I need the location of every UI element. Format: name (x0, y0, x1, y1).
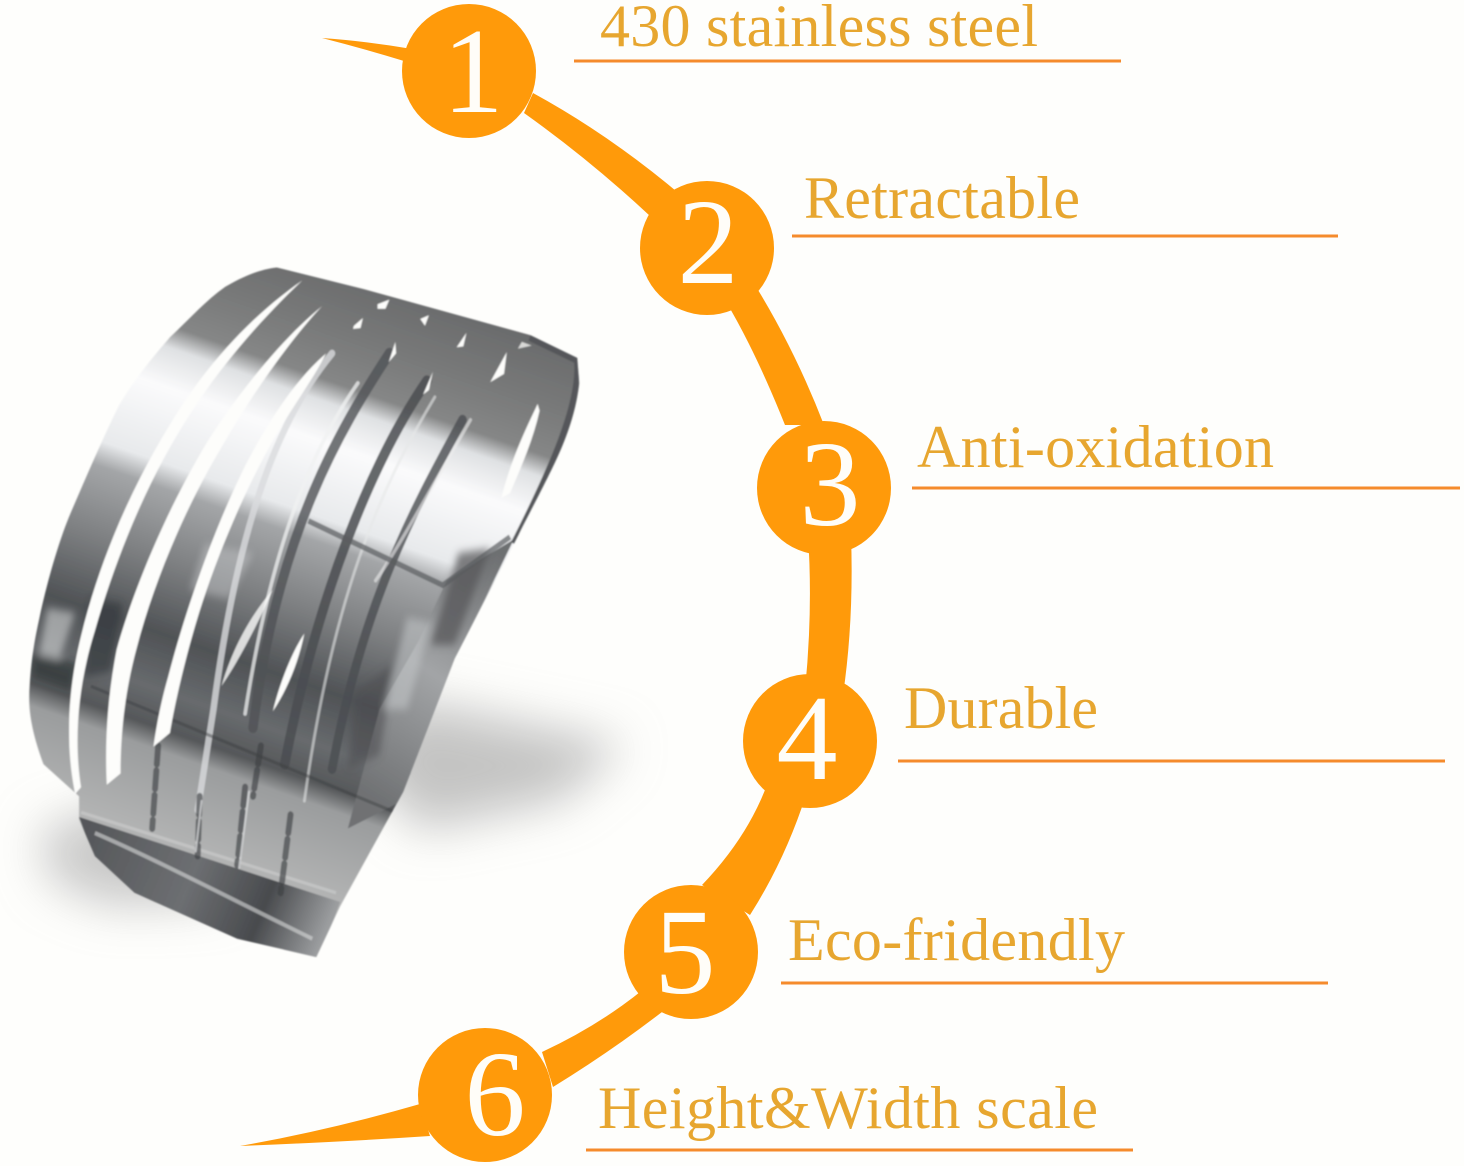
base plate (79, 817, 340, 966)
slit 3 (153, 353, 326, 747)
slit 5 (273, 633, 304, 711)
badge 6: 6 (464, 1027, 526, 1162)
feature 6: Height&Width scale: Height&Width scale (598, 1075, 1098, 1141)
white slits between bands (69, 280, 540, 794)
slit 6 (221, 590, 273, 686)
connector 3 to 4 (805, 535, 852, 695)
badge 6 (418, 1027, 552, 1162)
badge 4: 4 (776, 671, 838, 806)
badge 3: 3 (800, 417, 860, 552)
horizon fold line (91, 686, 395, 812)
slit 1 (69, 280, 302, 794)
badge 2: 2 (678, 175, 738, 310)
feature 2: Retractable: Retractable (804, 165, 1080, 231)
feature 4: Durable: Durable (904, 675, 1098, 741)
badge 1 (402, 4, 536, 139)
rim edge (514, 337, 578, 544)
ring base metal (28, 266, 580, 922)
inner reflection (32, 544, 490, 769)
slit 4 (501, 404, 540, 498)
connector 1 to 2 (524, 93, 682, 216)
connector 4 to 5 (702, 790, 806, 915)
curve tail top (322, 38, 412, 61)
ground shadow (40, 700, 625, 905)
band gap lines (152, 353, 470, 893)
feature 3: Anti-oxidation: Anti-oxidation (917, 414, 1274, 480)
see-through interior (348, 539, 514, 828)
product photo: stainless steel adjustable ring (28, 266, 580, 958)
top cutouts (378, 300, 389, 309)
badge 2 (640, 175, 774, 315)
slit 2 (106, 306, 322, 785)
badge 5: 5 (654, 885, 716, 1020)
badge 5 (624, 885, 758, 1020)
badge 3 (757, 417, 891, 555)
orange timeline (240, 38, 852, 1146)
badge 1: 1 (442, 4, 504, 139)
connector 5 to 6 (542, 988, 662, 1087)
plate highlights (95, 833, 312, 939)
badge 4 (743, 671, 877, 808)
curve tail bottom (240, 1104, 430, 1146)
connector 2 to 3 (725, 285, 824, 425)
feature 5: Eco-fridendly: Eco-fridendly (788, 907, 1125, 973)
